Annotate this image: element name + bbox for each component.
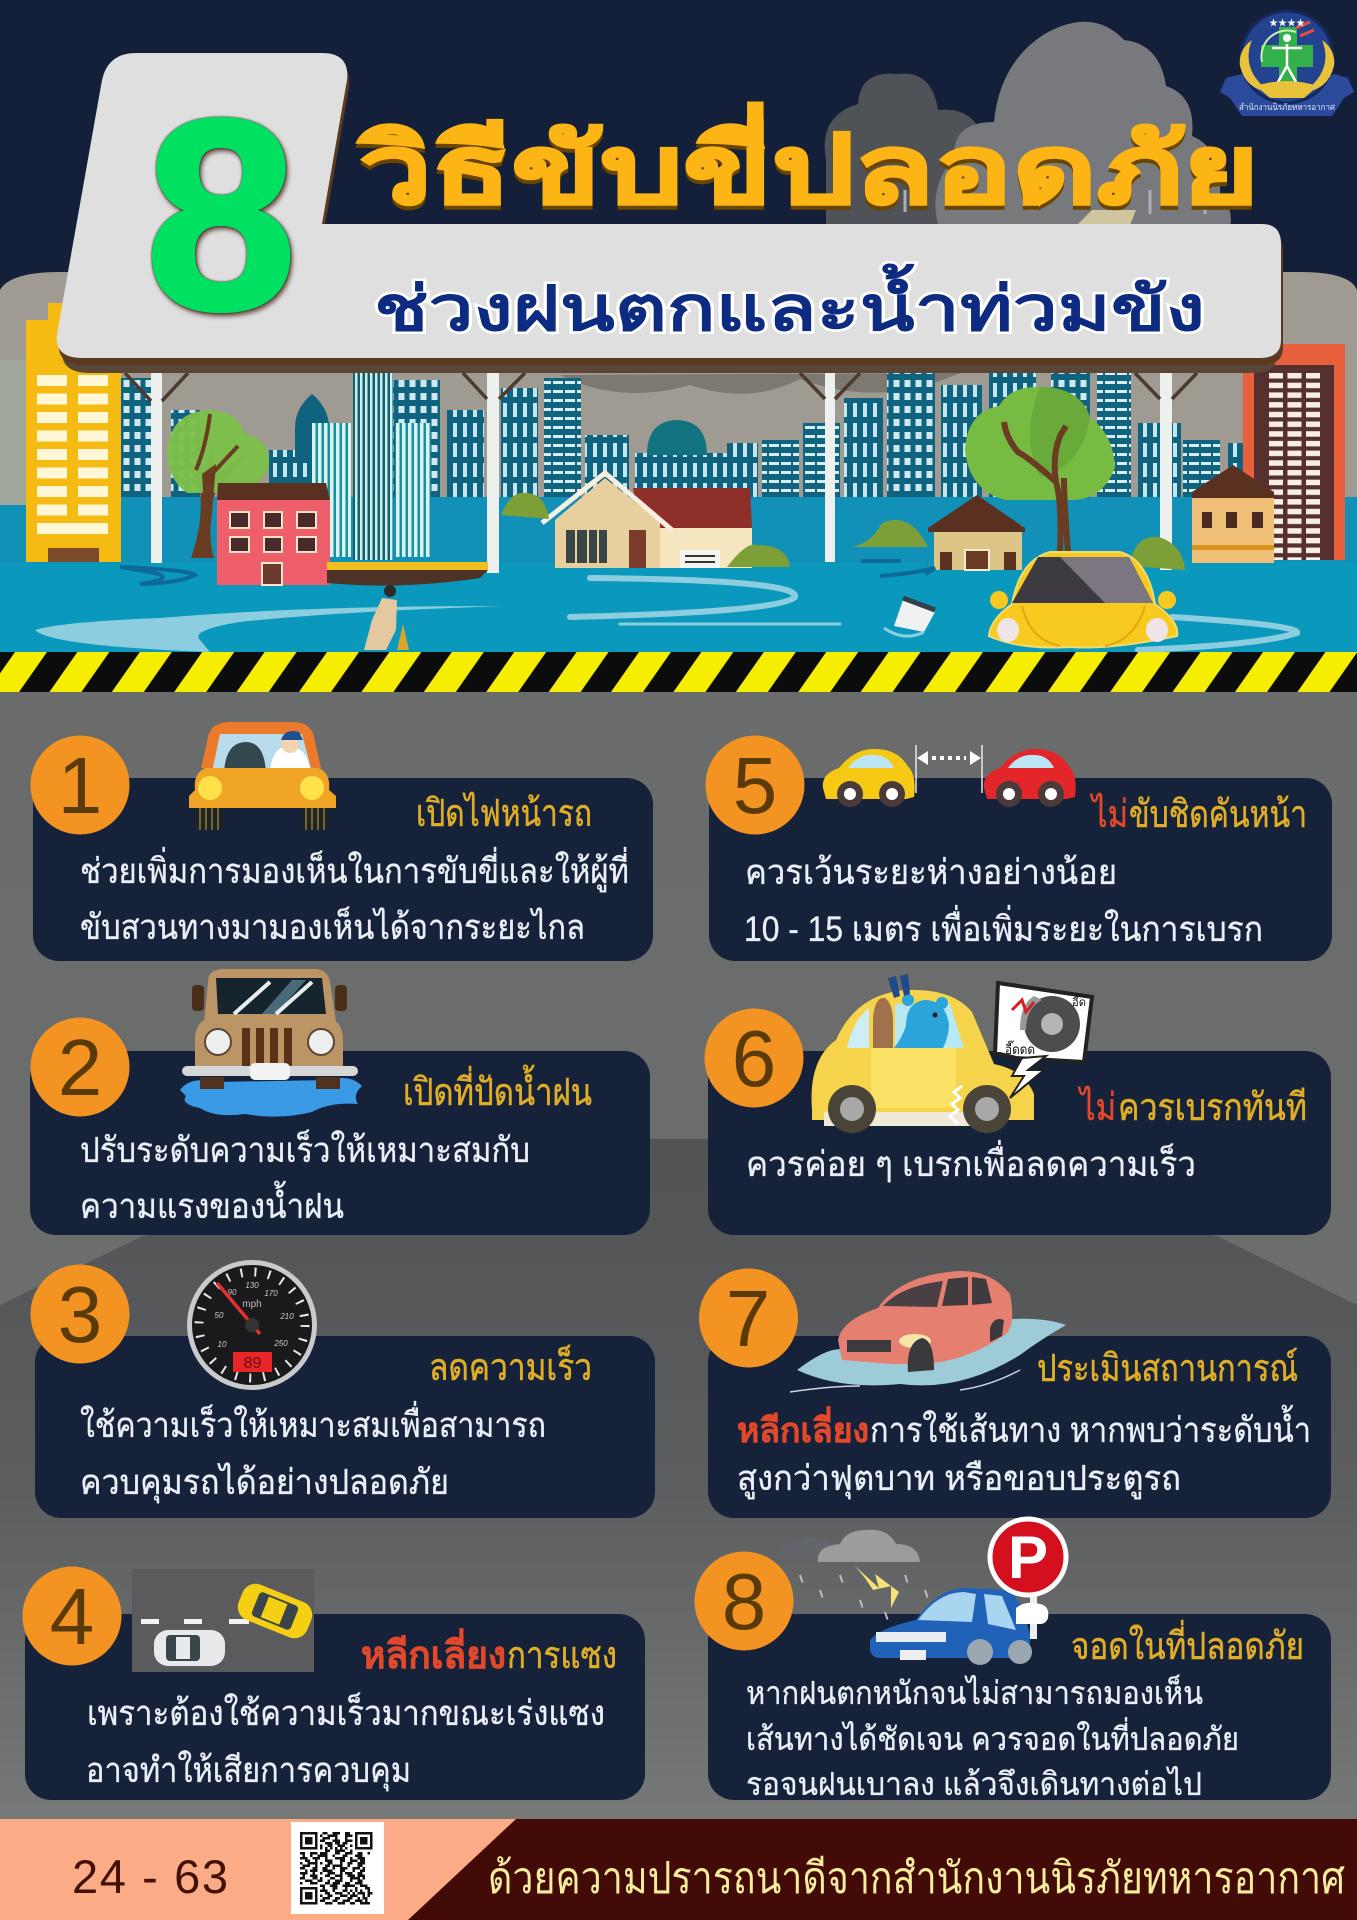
- icon: speedometer: [187, 1260, 317, 1390]
- step 3 text: ควบคุมรถได้อย่างปลอดภัย: [80, 1462, 449, 1503]
- step 4 badge: [22, 1566, 122, 1666]
- step 5 badge: 5: [733, 741, 777, 830]
- city skyline scene: [0, 272, 1357, 652]
- left yellow building: [26, 303, 121, 562]
- striped glass towers: [312, 373, 431, 560]
- step 5 heading: [1090, 793, 1307, 836]
- icon: brake disc callout: [995, 983, 1092, 1098]
- step 6 text: ควรค่อย ๆ เบรกเพื่อลดความเร็ว: [746, 1140, 1196, 1184]
- panel: step 1: [30, 722, 653, 961]
- big number 8: 8: [146, 65, 296, 366]
- panel: step 4: [22, 1566, 645, 1800]
- issue number: 24 - 63: [72, 1850, 228, 1903]
- icon: jeep with wipers in puddle: [180, 969, 362, 1117]
- step 5 text: [744, 853, 1263, 949]
- step 7 text: [737, 1404, 1311, 1499]
- step 7 text: หลีกเลี่ยง: [737, 1406, 869, 1450]
- step 3 heading: ลดความเร็ว: [429, 1344, 592, 1389]
- icon: brake disc callout: อี๊ดดด: [1005, 1040, 1035, 1057]
- step 8 heading: จอดในที่ปลอดภัย: [1071, 1620, 1304, 1668]
- icon: yellow car braking: [812, 974, 1034, 1133]
- step 4 text: อาจทำให้เสียการควบคุม: [86, 1750, 411, 1791]
- icon: speedometer: 10: [218, 1340, 227, 1349]
- storm clouds: [825, 22, 1231, 240]
- small brown house: [928, 495, 1025, 570]
- step 2 badge: 2: [58, 1023, 102, 1112]
- left tree: [167, 410, 269, 558]
- step 1 text: ขับสวนทางมามองเห็นได้จากระยะไกล: [80, 906, 585, 947]
- step 6 heading: ควรเบรกทันที: [1118, 1087, 1307, 1129]
- step 8 text: [746, 1674, 1239, 1802]
- icon: speedometer: 90: [228, 1288, 237, 1297]
- person wading: [364, 585, 409, 650]
- panel: step 6: [704, 974, 1331, 1235]
- step 8 badge: [694, 1552, 794, 1650]
- step 4 heading: [361, 1628, 617, 1677]
- panel: step 8: [694, 1519, 1331, 1802]
- step 8 text: หากฝนตกหนักจนไม่สามารถมองเห็น: [746, 1674, 1203, 1711]
- step 5 text: 10 - 15 เมตร เพื่อเพิ่มระยะในการเบรก: [744, 905, 1263, 949]
- icon: speedometer: 89: [244, 1355, 262, 1372]
- icon: speedometer: 50: [215, 1311, 224, 1320]
- title line 2: ช่วงฝนตกและน้ำท่วมขัง: [374, 263, 1205, 344]
- step 2 heading: เปิดที่ปัดน้ำฝน: [403, 1064, 592, 1114]
- emblem: air force safety center logo: สำนักงานนิรภัยทหารอากาศ: [1239, 102, 1335, 112]
- step 7 badge: [699, 1268, 798, 1368]
- right tree: [965, 387, 1115, 552]
- gray background: [0, 692, 1357, 1820]
- step 4 badge: 4: [50, 1572, 94, 1661]
- icon: speedometer: mph: [242, 1299, 262, 1310]
- step 5 text: ควรเว้นระยะห่างอย่างน้อย: [745, 853, 1117, 892]
- step 3 badge: 3: [58, 1270, 102, 1359]
- step 3 badge: [30, 1264, 130, 1364]
- flooded yellow car: [989, 552, 1177, 648]
- title line 1: วิธีขับขี่ปลอดภัย: [358, 102, 1259, 224]
- skyline towers: [121, 373, 1243, 505]
- water: [0, 497, 1357, 652]
- pink house: [217, 483, 330, 585]
- step 3 text: [80, 1401, 546, 1503]
- step 1 heading: เปิดไฟหน้ารถ: [416, 792, 592, 835]
- step 4 heading: การแซง: [507, 1635, 617, 1677]
- emblem: air force safety center logo: ★★★★: [1269, 18, 1305, 28]
- step 2 text: ปรับระดับความเร็วให้เหมาะสมกับ: [80, 1129, 530, 1170]
- step 2 badge: [30, 1018, 130, 1116]
- hazard stripe: [0, 652, 1357, 692]
- beige house: [542, 473, 752, 568]
- step 6 badge: 6: [732, 1014, 776, 1103]
- step 1 badge: [30, 736, 130, 834]
- elevated road: [62, 355, 1276, 373]
- icon: speedometer: 250: [273, 1339, 288, 1348]
- right tan house: [1192, 465, 1274, 563]
- water swirls: [35, 561, 1297, 652]
- icon: blue car with parking sign: [870, 1519, 1066, 1665]
- QR code: [291, 1822, 384, 1914]
- step 4 text: [86, 1692, 605, 1791]
- icon: blue car with parking sign: P: [1008, 1524, 1048, 1591]
- icon: pink car in floodwater: [790, 1271, 1066, 1392]
- icon: rain cloud and lightning: [775, 1530, 929, 1624]
- footer bar: [0, 1819, 1357, 1920]
- step 8 text: รอจนฝนเบาลง แล้วจึงเดินทางต่อไป: [746, 1766, 1202, 1802]
- step 7 text: สูงกว่าฟุตบาท หรือขอบประตูรถ: [737, 1459, 1181, 1499]
- step 1 badge: 1: [58, 741, 102, 830]
- step 6 heading: ไม่: [1078, 1086, 1116, 1129]
- panel: step 7: [699, 1268, 1331, 1518]
- step 2 text: ความแรงของน้ำฝน: [80, 1180, 344, 1226]
- step 5 heading: ขับชิดคันหน้า: [1129, 794, 1307, 836]
- step 7 text: การใช้เส้นทาง หากพบว่าระดับน้ำ: [870, 1404, 1311, 1450]
- step 5 heading: ไม่: [1090, 793, 1128, 836]
- icon: speedometer: 170: [264, 1289, 278, 1298]
- header background: [0, 0, 1357, 652]
- step 7 badge: 7: [726, 1274, 770, 1363]
- step 1 text: ช่วยเพิ่มการมองเห็นในการขับขี่และให้ผู้ที่: [80, 847, 629, 892]
- right orange building: [1243, 344, 1345, 560]
- emblem: air force safety center logo: [1220, 11, 1354, 116]
- panel: step 2: [30, 969, 650, 1235]
- yellow and brown bank: [327, 562, 488, 586]
- step 7 heading: ประเมินสถานการณ์: [1037, 1347, 1298, 1390]
- icon: speedometer: 130: [245, 1281, 259, 1290]
- step 4 heading: หลีกเลี่ยง: [361, 1628, 506, 1677]
- icon: speedometer: 210: [279, 1312, 294, 1321]
- icon: overtaking road tile: [132, 1569, 316, 1672]
- step 5 badge: [706, 736, 804, 834]
- icon: brake disc callout: อี๊ด: [1072, 994, 1086, 1009]
- icon: orange car headlights: [189, 722, 336, 830]
- step 8 badge: 8: [722, 1557, 766, 1646]
- pillars: [151, 373, 1172, 573]
- shrubs: [501, 493, 1185, 570]
- step 1 text: [80, 847, 629, 947]
- step 8 text: เส้นทางได้ชัดเจน ควรจอดในที่ปลอดภัย: [746, 1717, 1239, 1757]
- step 2 text: [80, 1129, 530, 1226]
- step 4 text: เพราะต้องใช้ความเร็วมากขณะเร่งแซง: [87, 1692, 605, 1733]
- road shape: [0, 1139, 1357, 1820]
- step 6 badge: [704, 1008, 804, 1108]
- panel: step 3: [30, 1260, 655, 1518]
- step 3 text: ใช้ความเร็วให้เหมาะสมเพื่อสามารถ: [80, 1401, 546, 1445]
- floating bucket: [884, 598, 935, 636]
- icon: two cars with following distance: [823, 745, 1076, 807]
- panel: step 5: [706, 736, 1332, 961]
- title card: [57, 53, 1283, 365]
